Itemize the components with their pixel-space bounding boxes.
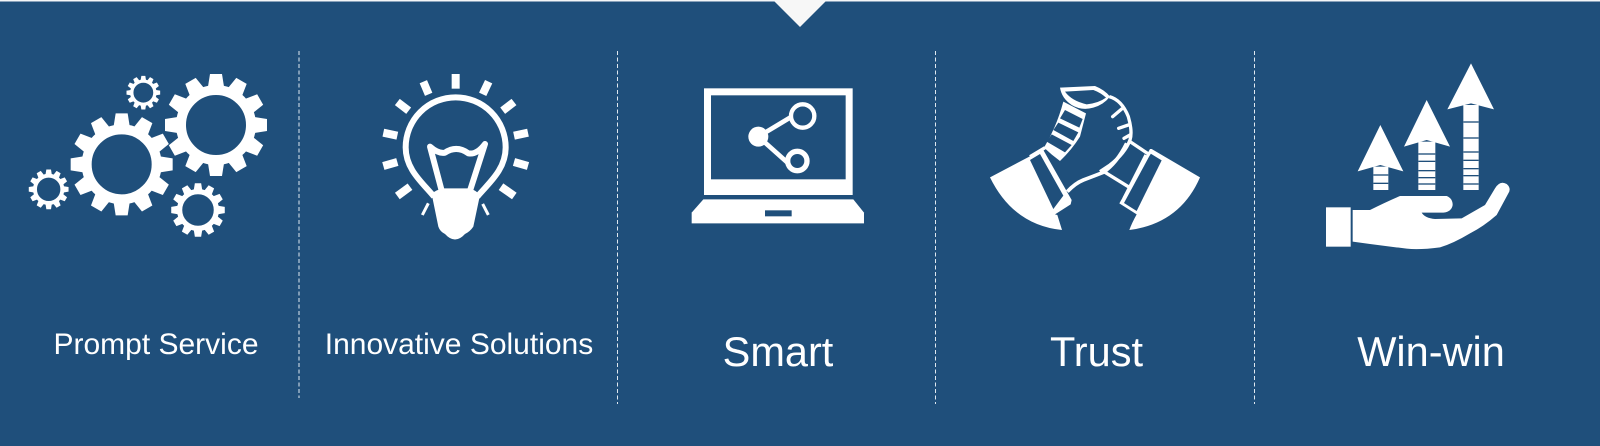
icon: laptop with share symbol xyxy=(692,88,864,223)
panel: innovative solutions xyxy=(325,74,593,361)
label: trust: Trust xyxy=(1050,328,1143,375)
notch pointer xyxy=(773,0,827,27)
label: innovative solutions: Innovative Solutions xyxy=(325,328,593,361)
panel: prompt service xyxy=(29,74,267,361)
icon: hand with rising arrows xyxy=(1326,63,1510,249)
label: win-win: Win-win xyxy=(1357,328,1505,375)
label: prompt service: Prompt Service xyxy=(53,328,259,361)
panel: smart xyxy=(692,88,864,375)
label: smart: Smart xyxy=(723,328,834,375)
icon: handshake xyxy=(990,86,1200,230)
icon: light bulb xyxy=(383,74,528,239)
panel: win-win xyxy=(1326,63,1510,375)
icon: gears xyxy=(29,74,267,237)
panel: trust xyxy=(990,86,1200,375)
